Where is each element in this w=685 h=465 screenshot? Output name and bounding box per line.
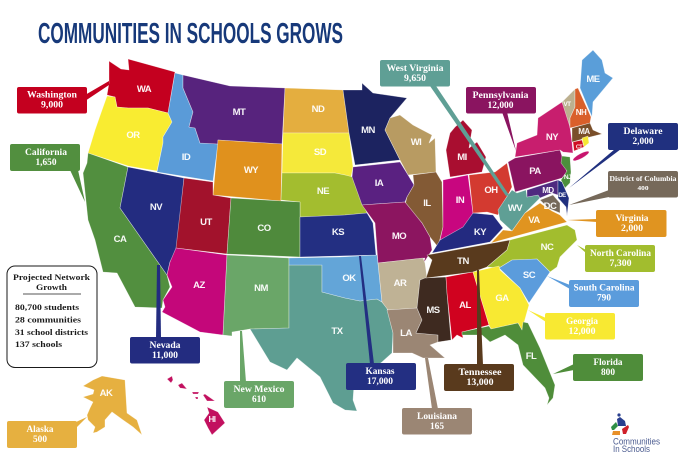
state: Minnesota: MN (361, 125, 376, 136)
legend: projected network growth: 28 communities (15, 314, 82, 324)
state: New Mexico: NM (254, 283, 268, 294)
callout: Georgia (528, 310, 615, 340)
state: Delaware (558, 180, 569, 216)
state: South Dakota: SD (314, 147, 327, 158)
state: Alabama (446, 272, 489, 340)
state: Pennsylvania: PA (529, 166, 541, 177)
state: Alaska: AK (100, 388, 113, 399)
callout: South Carolina (547, 276, 639, 307)
state: Arizona: AZ (193, 280, 206, 291)
callout: California (10, 144, 85, 202)
state: Missouri (362, 202, 432, 264)
callout: Kansas (346, 256, 416, 390)
state: Texas: TX (331, 326, 344, 337)
state: Wyoming (213, 140, 282, 201)
state: Kansas: KS (332, 227, 344, 238)
state: Pennsylvania (508, 150, 567, 192)
state: Maine: ME (586, 74, 600, 85)
callout: District of Columbia: District of Columbia (610, 174, 677, 183)
state: Rhode Island (582, 136, 589, 147)
callout: South Carolina: South Carolina (574, 284, 635, 294)
state: Minnesota (343, 83, 407, 165)
state: Florida (462, 322, 555, 405)
state: Wisconsin: WI (411, 137, 421, 148)
state: District of Columbia: DC (544, 201, 557, 212)
callout: Delaware: Delaware (624, 127, 662, 137)
state: Iowa: IA (375, 178, 384, 189)
callout: Washington: Washington (27, 90, 78, 100)
state: Utah (176, 178, 231, 254)
state: Wisconsin (385, 115, 436, 175)
callout: West Virginia: West Virginia (386, 64, 444, 74)
callout: Virginia: Virginia (616, 214, 649, 224)
state: Hawaii: HI (208, 415, 216, 424)
state: Maryland (527, 180, 558, 198)
state: South Carolina (499, 259, 550, 303)
state: New York (515, 102, 573, 157)
state: South Dakota (282, 133, 353, 177)
state: Louisiana: LA (400, 328, 412, 339)
state: Oklahoma (289, 255, 382, 302)
state: Maryland: MD (542, 186, 554, 195)
callout: District of Columbia: 400 (638, 185, 648, 192)
callout: Louisiana: Louisiana (417, 412, 457, 422)
legend: projected network growth: 137 schools (15, 339, 63, 349)
state: North Dakota (283, 88, 349, 133)
legend: projected network growth: Projected Network (13, 272, 90, 282)
logo: Communities In Schools: Communities (613, 436, 661, 446)
state: Louisiana (387, 308, 445, 358)
callout: Georgia: Georgia (566, 317, 598, 327)
state: Alaska (83, 376, 142, 435)
state: Kansas (300, 213, 376, 257)
callout: Pennsylvania: 12,000 (488, 101, 514, 111)
state: Kentucky: KY (474, 227, 487, 238)
state: North Carolina (487, 225, 577, 272)
state: California (83, 153, 170, 308)
state: Connecticut: CT (576, 144, 583, 150)
state: Massachusetts: MA (578, 127, 590, 136)
state: Idaho (157, 73, 218, 181)
state: West Virginia (498, 190, 540, 231)
callout: Washington (17, 81, 109, 114)
state: Massachusetts (572, 123, 602, 142)
state: Tennessee (426, 240, 510, 278)
state: New York: NY (546, 132, 559, 143)
callout: New Mexico: 610 (252, 395, 266, 405)
state: Nebraska (281, 173, 367, 217)
state: Michigan: MI (457, 152, 467, 163)
state: South Carolina: SC (523, 270, 536, 281)
callout: North Carolina: 7,300 (610, 259, 632, 269)
logo: Communities In Schools (611, 413, 661, 454)
callout: Georgia: 12,000 (568, 327, 596, 337)
state: Alabama: AL (459, 300, 472, 311)
state: Illinois: IL (423, 198, 431, 209)
callout: Florida: Florida (594, 358, 623, 368)
state: North Dakota: ND (312, 104, 325, 115)
state: Missouri: MO (392, 231, 406, 242)
callout: Washington: 9,000 (41, 100, 63, 110)
state: Ohio (469, 163, 512, 215)
state: District of Columbia (540, 195, 560, 213)
state: Arkansas: AR (394, 278, 407, 289)
state: Mississippi (416, 277, 451, 342)
state: Florida: FL (526, 351, 537, 362)
state: Virginia: VA (528, 215, 540, 226)
state: Arizona (162, 248, 227, 335)
logo: Communities In Schools: In Schools (613, 444, 651, 454)
callout: Kansas: 17,000 (367, 377, 393, 387)
callout: Virginia (567, 210, 666, 237)
legend: projected network growth (7, 266, 97, 368)
callout: New Mexico (224, 331, 294, 408)
callout: Delaware (569, 123, 678, 188)
state: Mississippi: MS (426, 305, 440, 316)
state: New Mexico (223, 255, 289, 336)
legend: projected network growth: 31 school districts (15, 327, 89, 337)
state: Georgia (473, 266, 529, 330)
state: Michigan (446, 120, 486, 177)
callout: Florida (553, 354, 643, 381)
callout: Florida: 800 (601, 368, 615, 378)
state: New Hampshire (570, 88, 591, 128)
callout: Virginia: 2,000 (621, 224, 643, 234)
state: West Virginia: WV (508, 203, 523, 214)
callout: Tennessee: 13,000 (466, 378, 494, 388)
state: Oregon: OR (126, 130, 140, 141)
state: Washington: WA (137, 84, 152, 95)
callout: North Carolina (577, 245, 655, 272)
state: Kentucky (432, 213, 503, 253)
state: California: CA (114, 234, 127, 245)
state: Delaware: DE (558, 193, 566, 199)
state: Wyoming: WY (244, 165, 259, 176)
state: New Hampshire: NH (576, 108, 587, 117)
state: Washington (107, 59, 175, 113)
callout: Nevada (130, 265, 200, 364)
callout: Louisiana: 165 (430, 422, 444, 432)
callout: West Virginia (380, 60, 509, 196)
state: Arkansas (378, 258, 427, 310)
callout: California: 1,650 (36, 158, 57, 168)
callout: North Carolina: North Carolina (590, 249, 651, 259)
callout: South Carolina: 790 (597, 294, 611, 304)
state: Maine (580, 50, 613, 117)
callout: Nevada: Nevada (150, 341, 181, 351)
map of US states (83, 50, 613, 435)
state: Georgia: GA (495, 293, 509, 304)
state: Connecticut (573, 140, 584, 151)
callout: District of Columbia (569, 171, 678, 205)
state: North Carolina: NC (541, 242, 554, 253)
callout: Pennsylvania: Pennsylvania (472, 91, 529, 101)
callout: California: California (25, 148, 67, 158)
state: Nevada (120, 167, 184, 275)
state: Illinois (405, 172, 443, 247)
state: Virginia (491, 203, 567, 243)
state: Ohio: OH (484, 185, 498, 196)
state: Oregon (88, 96, 172, 171)
state: Nebraska: NE (317, 186, 329, 197)
state: Colorado: CO (257, 223, 271, 234)
state: New Jersey (561, 156, 572, 188)
state: Nevada: NV (150, 202, 163, 213)
state: Long Island (572, 150, 590, 162)
callout: Alaska: Alaska (26, 425, 54, 435)
state: New Jersey: NJ (564, 174, 572, 181)
callout: Louisiana (402, 358, 472, 434)
state: Vermont (562, 89, 575, 127)
legend: projected network growth: 80,700 students (15, 302, 80, 312)
callout: Tennessee (444, 270, 514, 391)
state: Montana: MT (233, 107, 246, 118)
callout: Alaska: 500 (33, 435, 47, 445)
state: Colorado (227, 198, 300, 257)
state: Hawaii (167, 376, 225, 435)
callout: New Mexico: New Mexico (234, 385, 285, 395)
state: Tennessee: TN (457, 256, 469, 267)
callout: Nevada: 11,000 (152, 351, 178, 361)
callout: Tennessee: Tennessee (458, 368, 502, 378)
state: Montana (183, 75, 285, 144)
state: Vermont: VT (563, 101, 571, 108)
callout: Delaware: 2,000 (632, 137, 654, 147)
callout: Kansas: Kansas (366, 367, 395, 377)
state: Iowa (352, 162, 414, 205)
state: Oklahoma: OK (342, 273, 356, 284)
state: Idaho: ID (182, 152, 191, 163)
title: COMMUNITIES IN SCHOOLS GROWS (38, 18, 343, 50)
state: Utah: UT (200, 217, 213, 228)
callout: Pennsylvania (466, 87, 536, 151)
callout: Alaska (7, 417, 87, 448)
legend: projected network growth: Growth (36, 282, 67, 292)
state: Indiana (440, 175, 473, 240)
state: Indiana: IN (456, 195, 465, 206)
state: Texas (250, 265, 393, 411)
callout: West Virginia: 9,650 (404, 74, 426, 84)
